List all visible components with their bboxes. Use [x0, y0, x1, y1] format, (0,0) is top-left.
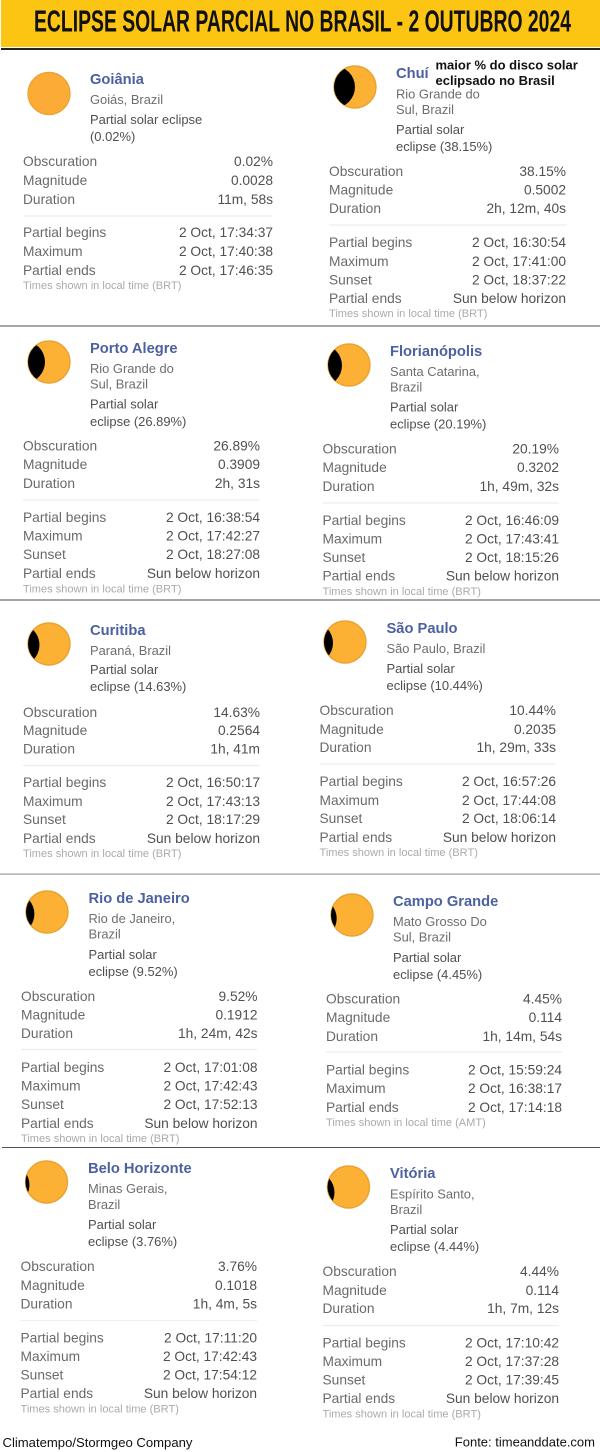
stats: magnitude: Duration [20, 1296, 72, 1312]
callout: largest obscuration: maior % do disco solar [436, 58, 578, 72]
region and eclipse type: eclipse (4.44%) [390, 1239, 479, 1254]
stats: times: Sun below horizon [446, 568, 559, 584]
stats: magnitude: Magnitude [23, 457, 88, 472]
stats: magnitude: 1h, 24m, 42s [178, 1026, 258, 1041]
stats: times: Partial begins [23, 775, 106, 790]
stats: times: 2 Oct, 15:59:24 [468, 1062, 562, 1078]
stats: magnitude: 0.1912 [215, 1008, 258, 1022]
icon: eclipse Curitiba [27, 622, 71, 666]
stats: times: 2 Oct, 17:43:41 [465, 532, 559, 546]
stats: times: 2 Oct, 17:46:35 [179, 263, 273, 278]
stats: magnitude: 1h, 7m, 12s [487, 1301, 559, 1316]
icon: eclipse Chuí [333, 65, 377, 109]
stats: times: 2 Oct, 18:17:29 [166, 812, 260, 827]
stats: magnitude: Duration [21, 1026, 73, 1041]
stats: magnitude: Duration [320, 740, 371, 755]
stats: magnitude: Obscuration [320, 703, 394, 718]
region and eclipse type: Partial solar [390, 1222, 459, 1237]
stats: times: Partial begins [23, 510, 106, 525]
stats: times: Times shown in local time (BRT) [320, 847, 478, 859]
stats: times: 2 Oct, 17:54:12 [163, 1368, 257, 1382]
stats: magnitude: 0.5002 [524, 182, 566, 198]
stats: times: Times shown in local time (BRT) [23, 280, 181, 292]
stats: times: Times shown in local time (BRT) [23, 848, 181, 860]
region and eclipse type [90, 92, 202, 144]
stats: magnitude: Magnitude [322, 1283, 387, 1298]
stats: magnitude: Obscuration [23, 705, 97, 720]
stats: times: Partial begins [322, 513, 406, 528]
stats: magnitude: Duration [23, 192, 75, 207]
region and eclipse type: Partial solar eclipse [90, 112, 202, 127]
stats: times: Maximum [322, 532, 382, 546]
stats: times [23, 510, 260, 596]
stats: magnitude: 3.76% [218, 1259, 257, 1274]
stats: magnitude: Duration [23, 742, 75, 756]
region and eclipse type: (0.02%) [90, 129, 135, 144]
stats: times: Sun below horizon [147, 831, 260, 846]
panel: São Paulo [320, 620, 556, 858]
stats: times: Sun below horizon [453, 291, 566, 306]
stats: magnitude [322, 442, 559, 494]
region and eclipse type [90, 361, 186, 429]
stats: times: 2 Oct, 18:27:08 [166, 547, 260, 562]
stats: times: Partial ends [21, 1116, 94, 1131]
stats: magnitude: Duration [329, 201, 381, 216]
stats: magnitude: Duration [326, 1029, 378, 1044]
stats: times: 2 Oct, 16:57:26 [462, 774, 556, 789]
stats: times: 2 Oct, 17:40:38 [179, 244, 273, 259]
stats: times: Sun below horizon [147, 566, 260, 581]
icon: eclipse Belo Horizonte [24, 1160, 68, 1204]
stats: magnitude: Magnitude [322, 460, 387, 475]
heading: Curitiba: Curitiba [90, 623, 146, 639]
stats: magnitude: 2h, 12m, 40s [486, 201, 566, 216]
stats: magnitude: Magnitude [23, 723, 88, 738]
stats: times: 2 Oct, 17:41:00 [472, 254, 566, 269]
stats: magnitude: Obscuration [322, 1264, 397, 1279]
stats: magnitude [329, 164, 566, 216]
stats: times: 2 Oct, 16:46:09 [465, 513, 559, 528]
stats: times: 2 Oct, 18:06:14 [462, 811, 556, 826]
icon: eclipse Porto Alegre [27, 340, 71, 384]
stats: magnitude: 0.2564 [218, 723, 260, 738]
stats: times: Sunset [21, 1097, 64, 1112]
region and eclipse type [386, 641, 485, 693]
callout: largest obscuration: eclipsado no Brasil [436, 73, 555, 88]
stats: times: 2 Oct, 17:42:43 [163, 1078, 258, 1094]
stats: magnitude [23, 154, 273, 207]
stats: times: Partial begins [326, 1062, 409, 1078]
heading: Campo Grande: Campo Grande [393, 894, 498, 910]
region and eclipse type: Santa Catarina, [390, 364, 480, 379]
callout: largest obscuration [436, 58, 578, 88]
stats: magnitude: 20.19% [512, 442, 559, 456]
region and eclipse type [88, 911, 178, 979]
stats: magnitude: 0.2035 [514, 722, 556, 737]
region and eclipse type: Rio Grande do [90, 361, 174, 376]
stats: magnitude: Magnitude [320, 722, 384, 737]
stats: times: Partial ends [329, 291, 402, 306]
region and eclipse type [88, 1181, 177, 1249]
stats: times: Sun below horizon [443, 830, 556, 845]
stats: magnitude: 4.45% [523, 992, 562, 1006]
stats: magnitude: 0.1018 [215, 1278, 257, 1293]
stats: magnitude: Obscuration [23, 438, 97, 454]
stats: magnitude: 14.63% [213, 705, 260, 720]
icon: eclipse Campo Grande [330, 893, 374, 937]
stats: magnitude: 1h, 4m, 5s [193, 1296, 257, 1312]
stats: times: Maximum [23, 528, 83, 544]
stats: times: Sun below horizon [446, 1391, 559, 1406]
stats: times: Maximum [20, 1349, 80, 1364]
region and eclipse type: Partial solar [393, 950, 462, 965]
stats: times: 2 Oct, 17:42:27 [166, 528, 260, 544]
heading: São Paulo: São Paulo [386, 621, 458, 637]
region and eclipse type: eclipse (9.52%) [88, 964, 178, 979]
stats: magnitude [320, 703, 556, 755]
icon: eclipse Rio de Janeiro [25, 890, 69, 934]
panel: Goiânia [23, 72, 273, 292]
stats: magnitude: 1h, 14m, 54s [482, 1029, 562, 1044]
stats: times: Maximum [322, 1354, 382, 1369]
stats: magnitude: Duration [322, 479, 374, 494]
region and eclipse type: eclipse (38.15%) [396, 139, 492, 154]
heading: Florianópolis: Florianópolis [390, 344, 482, 360]
region and eclipse type: São Paulo, Brazil [386, 641, 485, 656]
stats: magnitude: Magnitude [23, 173, 88, 188]
stats: times: 2 Oct, 17:14:18 [468, 1100, 562, 1115]
region and eclipse type: eclipse (3.76%) [88, 1234, 177, 1249]
stats: times: Maximum [329, 254, 389, 269]
stats: magnitude: Magnitude [21, 1008, 86, 1022]
stats: times: Partial ends [320, 830, 392, 845]
region and eclipse type: Partial solar [88, 1217, 157, 1232]
stats: times: Maximum [326, 1081, 386, 1096]
heading: Rio de Janeiro: Rio de Janeiro [88, 891, 190, 907]
panel: Campo Grande [326, 893, 562, 1128]
stats: magnitude: Duration [322, 1301, 374, 1316]
region and eclipse type: Partial solar [390, 400, 459, 414]
stats: times: Sunset [23, 812, 66, 827]
stats: magnitude: Obscuration [20, 1259, 95, 1274]
stats: times: Partial ends [23, 566, 96, 581]
region and eclipse type: Partial solar [88, 947, 157, 962]
stats: magnitude: Duration [23, 476, 75, 491]
stats: times [322, 1336, 559, 1420]
stats: magnitude: 0.114 [529, 1010, 562, 1025]
stats: magnitude: Magnitude [326, 1010, 391, 1025]
icon: eclipse Florianópolis [327, 343, 371, 387]
stats: times: Times shown in local time (BRT) [20, 1404, 179, 1416]
stats: times [322, 513, 559, 598]
stats: times [329, 235, 566, 320]
region and eclipse type: Brazil [390, 1202, 422, 1217]
panel: Chuí [313, 58, 578, 320]
stats: times: Maximum [320, 793, 379, 808]
stats: magnitude: 26.89% [213, 438, 260, 454]
stats: times: 2 Oct, 16:50:17 [166, 775, 260, 790]
region and eclipse type: Rio de Janeiro, [88, 911, 175, 926]
region and eclipse type: Partial solar [396, 122, 465, 137]
stats: magnitude: Obscuration [329, 164, 403, 179]
region and eclipse type: Partial solar [90, 396, 159, 412]
stats: magnitude: 2h, 31s [215, 476, 260, 491]
footer source: Fonte: timeanddate.com [455, 1434, 595, 1450]
stats: magnitude: 1h, 41m [210, 742, 260, 756]
region and eclipse type: Paraná, Brazil [90, 643, 171, 658]
stats: times [23, 225, 273, 292]
stats: magnitude: 1h, 29m, 33s [476, 740, 556, 755]
stats: magnitude [21, 989, 258, 1041]
icon: eclipse São Paulo [323, 620, 367, 664]
stats: magnitude: 0.3202 [517, 460, 559, 475]
stats: times: Partial begins [329, 235, 412, 250]
stats: times: Maximum [23, 794, 83, 809]
heading: Goiânia: Goiânia [90, 72, 145, 88]
stats: magnitude [20, 1259, 257, 1312]
icon: sun Goiânia [28, 72, 70, 114]
stats: times: 2 Oct, 17:10:42 [465, 1336, 559, 1350]
region and eclipse type: Minas Gerais, [88, 1181, 168, 1196]
stats: times: Partial ends [23, 263, 96, 278]
panel: Rio de Janeiro [0, 891, 258, 1145]
region and eclipse type [390, 364, 486, 432]
stats: magnitude: Obscuration [322, 442, 397, 456]
stats: times: Maximum [23, 244, 83, 259]
stats: times: 2 Oct, 17:42:43 [163, 1349, 257, 1364]
stats: times: Partial ends [23, 831, 96, 846]
stats: times: 2 Oct, 17:01:08 [163, 1060, 258, 1075]
panel: Belo Horizonte [0, 1161, 257, 1416]
stats: times: 2 Oct, 17:39:45 [465, 1372, 559, 1388]
region and eclipse type: Partial solar [386, 661, 455, 676]
stats: magnitude: 38.15% [519, 164, 566, 179]
stats: magnitude: 10.44% [509, 703, 556, 718]
region and eclipse type: Mato Grosso Do [393, 914, 487, 929]
region and eclipse type [396, 86, 492, 154]
stats: times: Sunset [322, 1372, 365, 1388]
stats: times [326, 1062, 562, 1129]
panel: Florianópolis [300, 344, 559, 598]
stats: times: Times shown in local time (BRT) [23, 584, 181, 596]
stats: times: Times shown in local time (BRT) [322, 586, 481, 598]
stats: magnitude: 11m, 58s [217, 192, 273, 207]
region and eclipse type [393, 914, 487, 982]
region and eclipse type [90, 643, 186, 694]
stats: times: 2 Oct, 18:37:22 [472, 272, 566, 288]
stats: times: 2 Oct, 16:38:54 [166, 510, 260, 525]
heading: Belo Horizonte: Belo Horizonte [88, 1161, 192, 1177]
stats: times: Sunset [20, 1368, 63, 1382]
stats: times: Maximum [21, 1078, 81, 1094]
region and eclipse type: Brazil [390, 380, 422, 394]
region and eclipse type: Brazil [88, 926, 121, 942]
title banner [1, 0, 600, 50]
stats: times: Times shown in local time (BRT) [329, 308, 487, 320]
stats: times: 2 Oct, 17:11:20 [164, 1330, 257, 1346]
stats: times: Partial begins [20, 1330, 104, 1346]
region and eclipse type: Sul, Brazil [393, 930, 451, 944]
stats: times: Times shown in local time (BRT) [322, 1408, 481, 1420]
stats: times: 2 Oct, 17:37:28 [465, 1354, 559, 1369]
region and eclipse type: Brazil [88, 1197, 120, 1212]
stats: times [23, 775, 260, 860]
region and eclipse type: Partial solar [90, 662, 159, 677]
stats: times: Sunset [322, 550, 365, 565]
region and eclipse type: Sul, Brazil [396, 102, 454, 117]
stats: magnitude: 0.3909 [218, 457, 260, 472]
region and eclipse type: Goiás, Brazil [90, 92, 163, 107]
stats: magnitude [23, 705, 260, 756]
stats: magnitude [322, 1264, 559, 1316]
stats: magnitude [23, 438, 260, 491]
stats: times: 2 Oct, 17:44:08 [462, 793, 556, 808]
panel: Curitiba [0, 623, 260, 860]
stats: times: Partial begins [21, 1060, 104, 1075]
stats: times: Times shown in local time (AMT) [326, 1117, 486, 1129]
stats: times: 2 Oct, 18:15:26 [465, 550, 559, 565]
heading: Porto Alegre: Porto Alegre [90, 341, 178, 357]
stats: magnitude: Obscuration [21, 989, 95, 1004]
stats: times: Partial ends [20, 1386, 93, 1401]
stats: times [21, 1060, 258, 1145]
stats: magnitude: 0.0028 [231, 173, 273, 188]
stats: magnitude: 0.02% [234, 154, 273, 169]
region and eclipse type: eclipse (4.45%) [393, 967, 482, 982]
region and eclipse type: Rio Grande do [396, 86, 480, 102]
stats: magnitude: Obscuration [326, 992, 400, 1006]
region and eclipse type: eclipse (26.89%) [90, 414, 186, 429]
stats: magnitude: 9.52% [218, 989, 258, 1004]
heading: Chuí: Chuí [396, 66, 430, 82]
stats: magnitude: 4.44% [520, 1264, 559, 1279]
stats: times: Sunset [23, 547, 66, 562]
stats: times: 2 Oct, 17:52:13 [163, 1097, 258, 1112]
stats: times: Partial ends [326, 1100, 399, 1115]
stats: times: Times shown in local time (BRT) [21, 1133, 179, 1145]
stats: times: Partial begins [23, 225, 106, 240]
stats: times [20, 1330, 257, 1416]
stats: times: Partial ends [322, 568, 395, 584]
footer credit: Climatempo/Stormgeo Company [2, 1435, 193, 1450]
panel: Vitória [322, 1165, 559, 1420]
region and eclipse type: eclipse (10.44%) [386, 678, 483, 693]
stats: magnitude [326, 992, 562, 1044]
stats: times: Sun below horizon [144, 1116, 258, 1131]
region and eclipse type: eclipse (14.63%) [90, 679, 186, 694]
stats: times: Partial begins [320, 774, 403, 789]
stats: times: Sunset [320, 811, 362, 826]
stats: times: Sun below horizon [144, 1386, 257, 1401]
region and eclipse type: Espírito Santo, [390, 1186, 475, 1202]
region and eclipse type: Sul, Brazil [90, 376, 148, 392]
region and eclipse type [390, 1186, 479, 1254]
stats: times: 2 Oct, 16:30:54 [472, 235, 566, 250]
stats: times: Sunset [329, 272, 372, 288]
heading: Vitória: Vitória [390, 1166, 436, 1182]
stats: times [320, 774, 556, 859]
stats: times: 2 Oct, 17:43:13 [166, 794, 260, 809]
stats: times: 2 Oct, 16:38:17 [468, 1081, 562, 1096]
panel: Porto Alegre [3, 341, 260, 596]
region and eclipse type: eclipse (20.19%) [390, 416, 486, 432]
icon: eclipse Vitória [326, 1165, 370, 1209]
stats: times: 2 Oct, 17:34:37 [179, 225, 273, 240]
stats: times: Partial begins [322, 1336, 406, 1350]
stats: magnitude: Magnitude [329, 182, 394, 198]
stats: times: Partial ends [322, 1391, 395, 1406]
stats: magnitude: Obscuration [23, 154, 97, 169]
stats: magnitude: Magnitude [20, 1278, 85, 1293]
stats: magnitude: 1h, 49m, 32s [480, 479, 559, 494]
stats: magnitude: 0.114 [526, 1283, 559, 1298]
